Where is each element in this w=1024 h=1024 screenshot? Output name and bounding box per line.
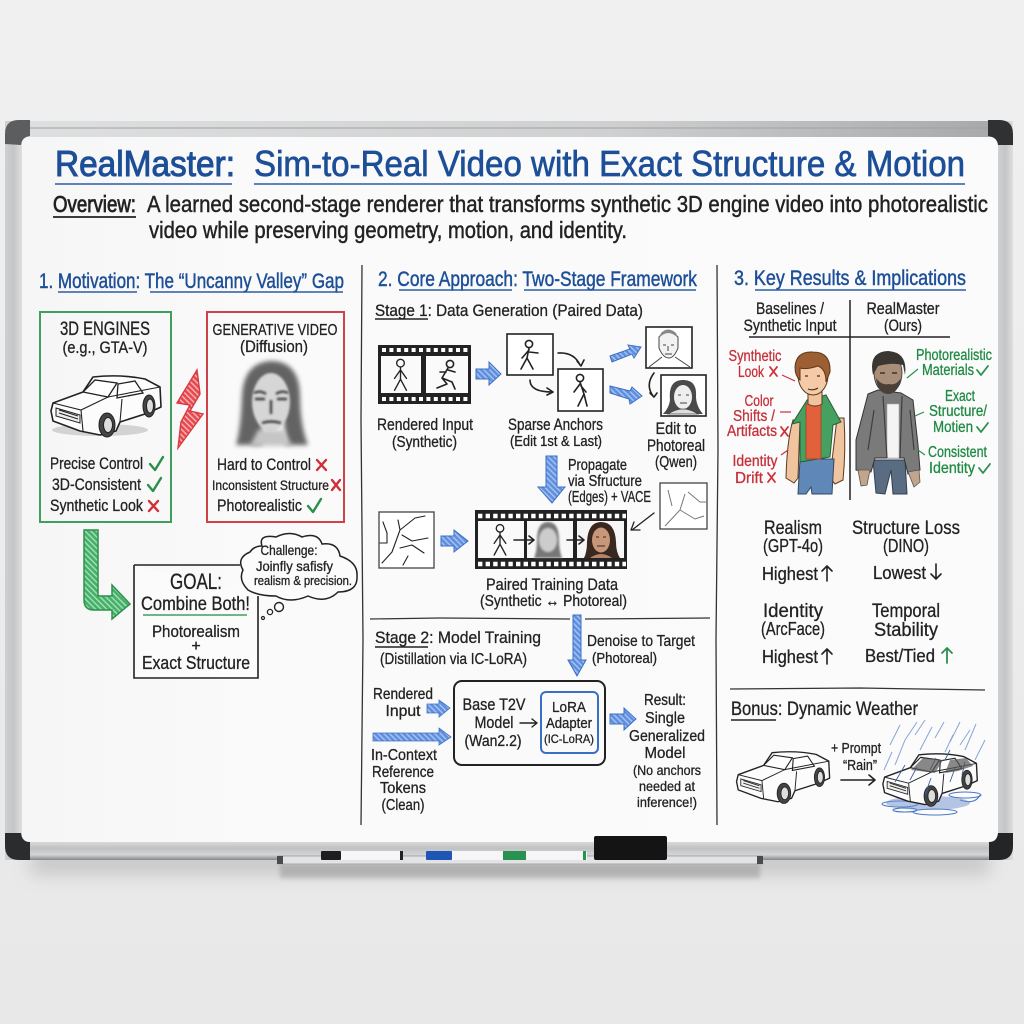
icon: car [51,376,161,437]
callouts: baselines: Look [738,364,765,381]
comparison table header: (Ours) [884,316,922,335]
labels: stage 1 row: (Qwen) [655,454,697,471]
stage 2 heading: Stage 2: Model Training [375,628,541,647]
label: prompt rain: + Prompt [831,740,882,757]
callouts: RealMaster: Materials [922,362,974,379]
LoRA adapter: Adapter [546,715,592,732]
metric: temporal stability: Stability [874,620,938,641]
inputs [371,686,451,814]
panel: goal: + [191,638,201,655]
metric: realism: Highest [762,564,818,584]
marker: green [503,851,587,860]
result text: inference!) [637,794,697,810]
panel: generative video: GENERATIVE VIDEO [212,322,338,339]
eraser [594,836,667,860]
LoRA adapter: LoRA [552,699,586,716]
model box [454,681,605,765]
callouts: baselines: Shifts / [733,408,775,425]
metric: structure loss: (DINO) [883,536,929,556]
label: denoise: (Photoreal) [592,650,657,667]
result text: Single [645,710,685,727]
result text: Generalized [629,728,705,745]
callout: challenge thought bubble: Challenge: [260,542,318,558]
labels: stage 1 row: Rendered Input [377,415,473,434]
arrow: propagate [538,456,565,503]
arrow: denoise [568,615,586,676]
film strip: rendered input [378,345,471,404]
whiteboard [5,120,1013,874]
heading: core approach: 2. Core Approach: Two-Stage Framework [378,268,697,291]
panel: 3D engines [40,312,171,522]
stage separator [370,618,710,619]
metric: structure loss: Lowest [873,563,926,583]
label: denoise [587,633,695,667]
labels: stage 1 row: Sparse Anchors [508,415,603,434]
metric: temporal stability [865,601,952,666]
metric: structure loss: Structure Loss [852,518,960,539]
stage 2 heading: (Distillation via IC-LoRA) [380,651,527,668]
callouts: baselines: Synthetic [728,348,782,365]
column dividers [361,265,718,825]
film strip: paired data [475,510,627,569]
label: propagate: Propagate [568,457,627,474]
edge map right [631,483,707,530]
LoRA adapter [541,692,598,753]
panel: goal: Combine Both! [141,594,250,615]
labels: stage 1 row [377,415,705,471]
overview text [53,191,988,243]
panel: generative video: Inconsistent Structure [212,477,329,493]
arrow: to goal [84,530,130,619]
metric: identity: Highest [762,647,818,667]
labels: stage 1 row: Edit to [656,419,696,438]
callouts: RealMaster: Identity [929,460,975,477]
callouts: RealMaster: Consistent [928,444,987,461]
bonus heading: Bonus: Dynamic Weather [731,699,919,720]
sparse anchor frames [507,334,603,411]
marker tray with markers and eraser [277,836,763,878]
model box: (Wan2.2) [464,733,522,750]
panel: generative video: (Diffusion) [240,337,308,356]
callouts: RealMaster [907,347,992,477]
panel: 3D engines: 3D ENGINES [60,319,150,340]
callouts: baselines [727,348,795,487]
panel: generative video [207,312,344,522]
heading: motivation: 1. Motivation: The “Uncanny Valley” Gap [39,270,344,293]
metric: structure loss [852,518,960,583]
icon: car in rain [882,720,985,815]
panel: 3D engines: (e.g., GTA-V) [62,338,148,357]
result text: (No anchors [633,762,701,778]
arrows: to photoreal [610,345,642,404]
labels: stage 1 row: (Synthetic) [392,434,457,451]
stage 2 heading [375,628,541,668]
comparison table header [744,299,950,500]
result text: Result: [644,692,686,709]
metric: temporal stability: Best/Tied [865,646,935,666]
label: propagate [568,457,651,506]
metric: identity [761,601,832,667]
callouts: RealMaster: Photorealistic [916,347,992,364]
callouts: baselines: Drift [735,470,764,487]
arrow: result [610,708,636,730]
panel: generative video: Hard to Control [217,455,311,474]
model box: Model [474,713,514,732]
metric: temporal stability: Temporal [872,601,940,622]
label: paired training data [480,575,627,610]
callout: challenge thought bubble [241,534,357,620]
overview text: Overview: [53,191,136,217]
comparison table header: Synthetic Input [744,316,837,335]
image: blurred face [236,361,308,446]
result text: Model [644,745,686,762]
panel: generative video: Photorealistic [217,496,302,515]
panel: goal: GOAL: [170,569,222,594]
label: denoise: Denoise to Target [587,633,695,650]
edge map left [379,512,434,568]
result text [629,692,705,810]
panel: 3D engines: Synthetic Look [50,496,143,515]
callouts: RealMaster: Structure/ [929,403,987,420]
metric: realism [762,518,832,584]
model box: Base T2V [462,695,526,714]
result text: needed at [639,778,695,794]
label: propagate: via Sfructure [568,473,642,490]
callouts: baselines: Color [744,393,774,410]
callouts: RealMaster: Motien [933,419,973,436]
panel: goal: Exact Structure [142,653,250,673]
metric: realism: Realism [764,518,822,539]
marker: blue [426,851,506,860]
inputs: In-Context [371,747,437,764]
marker: black [321,851,403,860]
section separator [730,688,985,690]
panel: 3D engines: 3D-Consistent [52,475,141,494]
overview text: video while preserving geometry, motion, and identity. [149,217,627,243]
portrait sketches [646,327,706,416]
label: prompt rain [831,740,882,785]
callout: challenge thought bubble: Joinfly safisfy [256,558,333,574]
comparison table header: Baselines / [756,299,824,318]
label: propagate: (Edges) + VACE [568,489,651,506]
title: RealMaster: [55,143,235,184]
inputs: Input [386,703,421,720]
panel: motivation [39,270,357,678]
metric: identity: Identity [763,601,823,622]
figure: photorealistic person [856,351,920,494]
label: prompt rain: “Rain” [843,757,877,774]
arrow [441,530,468,552]
labels: stage 1 row: Photoreal [647,436,705,455]
panel: goal [134,565,258,678]
inputs: Rendered [373,686,433,703]
LoRA adapter: (IC-LoRA) [544,732,594,746]
icon: lightning bolt [177,370,203,448]
metric: identity: (ArcFace) [761,619,825,639]
title: Sim-to-Real Video with Exact Structure & Motion [254,143,965,184]
figure: synthetic person [786,352,845,494]
callouts: RealMaster: Exact [945,388,975,405]
label: paired training data: Paired Training Data [486,575,618,594]
arrow [476,362,501,385]
callout: challenge thought bubble: realism & precision. [254,573,352,588]
panel: key results [727,267,992,815]
label: paired training data: (Synthetic ↔ Photoreal) [480,593,627,610]
inputs: Reference [372,764,434,781]
icon: plain car [737,752,830,803]
callouts: baselines: Identity [732,453,778,470]
panel: goal: Photorealism [152,622,240,641]
panel: 3D engines: Precise Control [50,454,143,473]
metric: realism: (GPT-4o) [763,536,823,556]
heading: key results: 3. Key Results & Implications [734,267,966,290]
panel: core approach [370,268,710,814]
inputs: (Clean) [382,797,424,814]
inputs: Tokens [380,780,426,797]
callouts: baselines: Artifacts [727,423,777,440]
labels: stage 1 row: (Edit 1st & Last) [510,433,602,450]
stage 1 heading: Stage 1: Data Generation (Paired Data) [375,301,643,320]
comparison table header: RealMaster [866,299,940,318]
